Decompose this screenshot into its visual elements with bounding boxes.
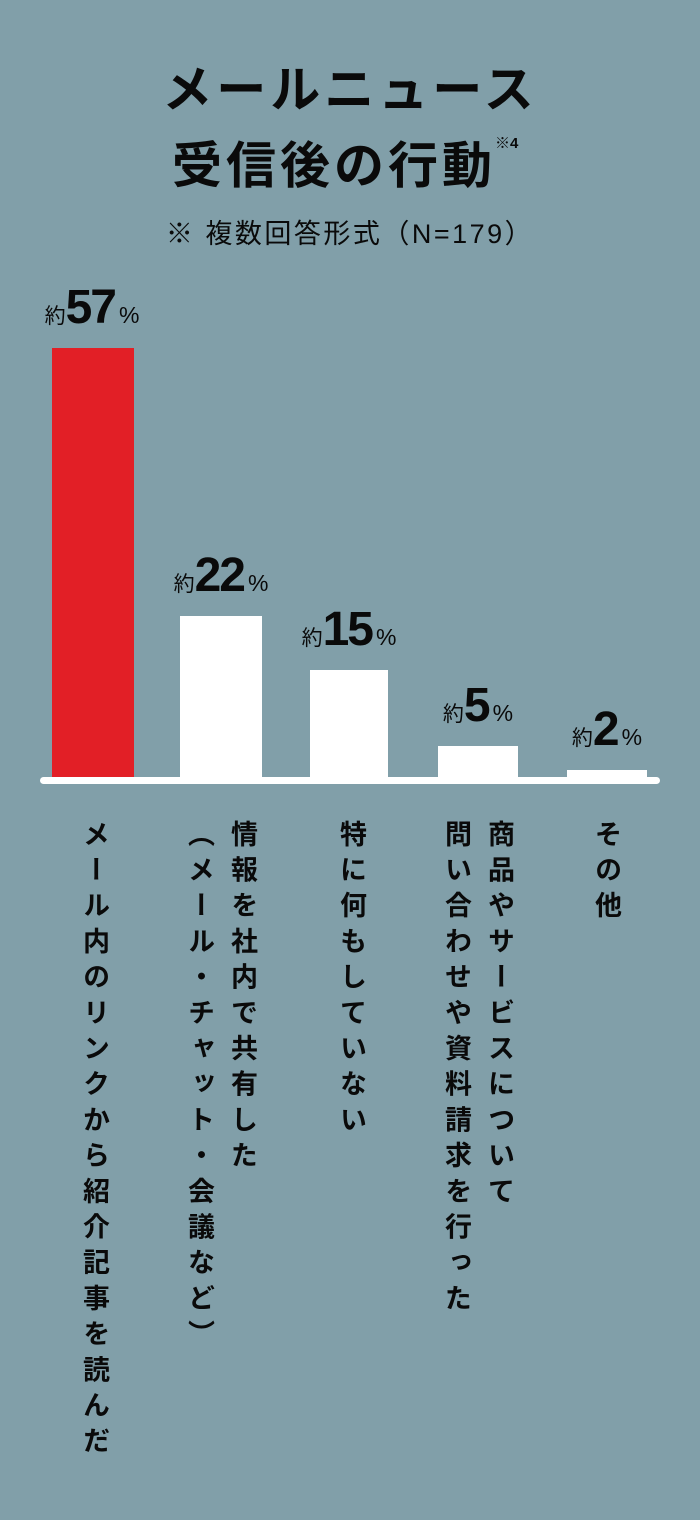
- baseline: [40, 777, 660, 784]
- label 2: （メール・チャット・会議など）: [184, 820, 214, 1356]
- title: メールニュース: [162, 62, 538, 118]
- label 4: [441, 820, 514, 1320]
- label 4: 商品やサービスについて: [484, 820, 514, 1213]
- title: 受信後の行動: [172, 138, 496, 194]
- footnote marker: ※4: [495, 135, 518, 152]
- bar 5: [438, 746, 518, 780]
- label 2: [184, 820, 258, 1356]
- value label 22: 約22%: [174, 549, 268, 602]
- value label 15: 約15%: [302, 603, 396, 656]
- label 5: その他: [591, 820, 621, 927]
- label 4: 問い合わせや資料請求を行った: [441, 820, 471, 1320]
- label 2: 情報を社内で共有した: [227, 820, 257, 1177]
- bar 2: [567, 770, 647, 780]
- value label 5: 約5%: [443, 679, 513, 732]
- label 3: 特に何もしていない: [336, 820, 366, 1141]
- title: [162, 62, 538, 194]
- bar 57: [52, 348, 134, 780]
- bar 15: [310, 670, 388, 780]
- value label 57: 約57%: [45, 281, 139, 334]
- bar 22: [180, 616, 262, 780]
- bar chart: [40, 281, 660, 784]
- value label 2: 約2%: [572, 703, 642, 756]
- label 1: メール内のリンクから紹介記事を読んだ: [79, 820, 109, 1463]
- subtitle: ※ 複数回答形式（N=179）: [166, 219, 534, 249]
